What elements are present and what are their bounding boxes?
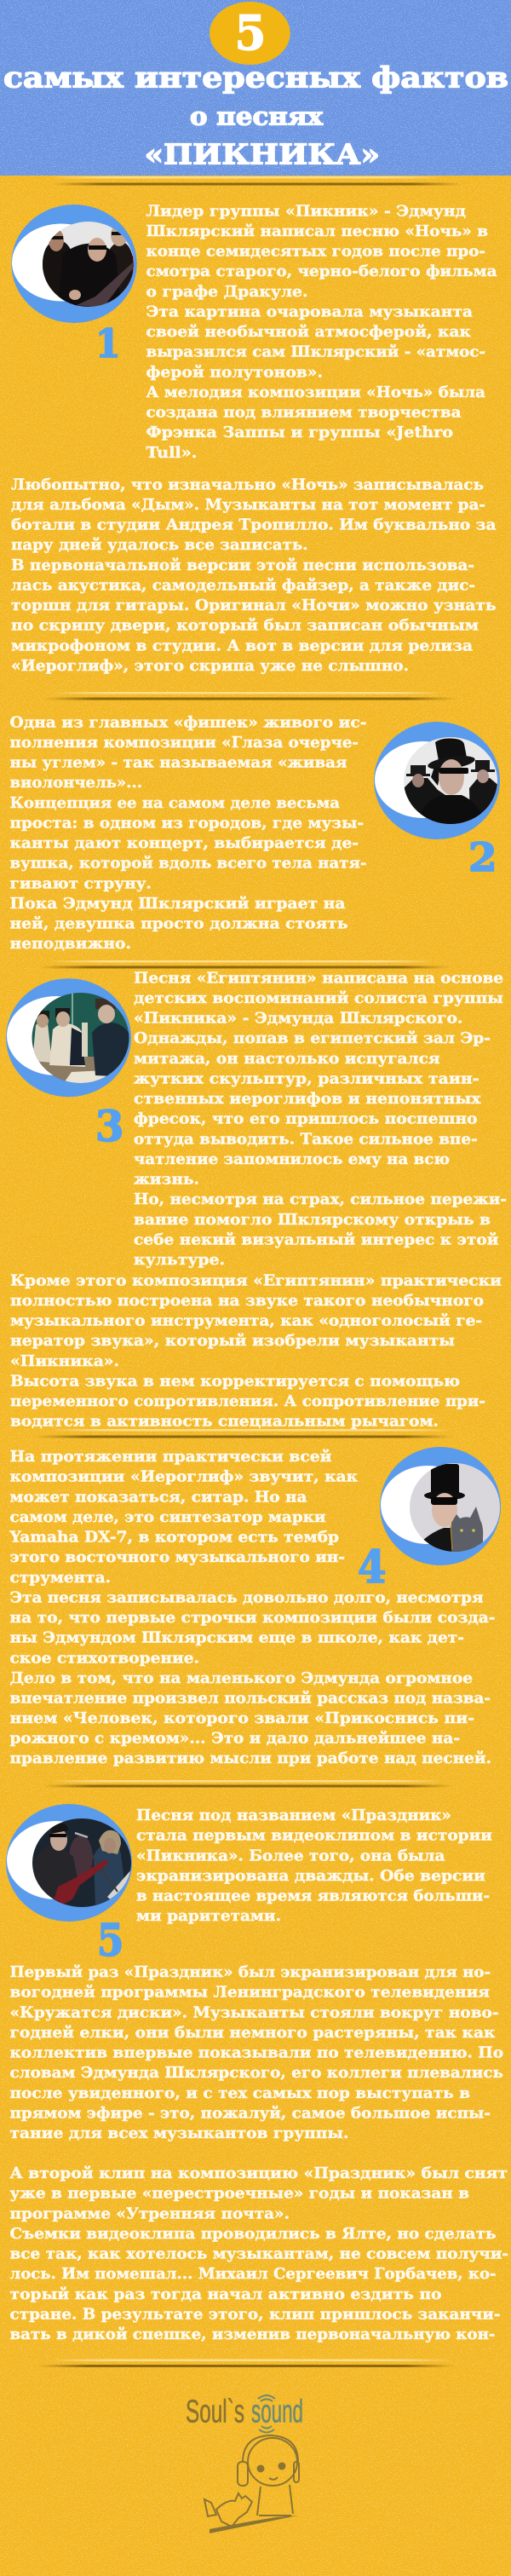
fact 1 intro text: выразился сам Шклярский - «атмос- — [146, 343, 485, 361]
divider 5 — [43, 1780, 453, 1788]
fact 5 second clip text: все так, как хотелось музыкантам, не совсем получи- — [10, 2245, 508, 2263]
fact 5 first clip text: годней елки, они были немного растеряны, так как — [10, 2024, 496, 2042]
fact 4 text: струмента. — [10, 1569, 111, 1587]
title line 3: «ПИКНИКА» — [145, 138, 380, 171]
logo: Soul's sound — [186, 2394, 303, 2533]
fact 3 intro text: детских воспоминаний солиста группы — [134, 989, 503, 1007]
fact 4 text: Эта песня записывалась довольно долго, несмотря — [10, 1588, 484, 1606]
fact 4 text: впечатление произвел польский рассказ под назва- — [10, 1690, 491, 1708]
fact 3 intro text: фресок, что его пришлось поспешно — [134, 1110, 478, 1128]
fact 1 intro text: смотра старого, черно-белого фильма — [146, 262, 497, 280]
fact 5 second clip text: уже в первые «перестроечные» годы и показан в — [10, 2185, 469, 2203]
fact 5 intro text: ми раритетами. — [136, 1907, 281, 1925]
fact 5 first clip text: тание для всех музыкантов группы. — [10, 2124, 349, 2142]
fact 5 second clip text: лось. Им помешал... Михаил Сергеевич Горбачев, ко- — [10, 2265, 496, 2283]
fact 5 first clip text — [10, 1963, 503, 2142]
fact 1 intro text: Лидер группы «Пикник» - Эдмунд — [146, 202, 466, 220]
fact 1 intro text: создана под влиянием творчества — [146, 404, 462, 422]
fact 2 text: полнения композиции «Глаза очерче- — [10, 734, 359, 752]
fact 5 intro text — [136, 1807, 492, 1925]
fact 4 text: композиции «Иероглиф» звучит, как — [10, 1468, 358, 1486]
fact 4 text: может показаться, ситар. Но на — [10, 1488, 307, 1506]
fact 3 intro text: чатление запомнилось ему на всю — [134, 1150, 450, 1168]
fact 3 intro text: оттуда выводить. Такое сильное впе- — [134, 1130, 478, 1148]
fact 2 text: Пока Эдмунд Шклярский играет на — [10, 895, 346, 913]
fact 5 intro text: стала первым видеоклипом в истории — [136, 1827, 492, 1845]
fact 4 text: самом деле, это синтезатор марки — [10, 1508, 325, 1526]
fact 5 intro text: экранизирована дважды. Обе версии — [136, 1867, 485, 1885]
fact 2 text: вушка, которой вдоль всего тела натя- — [10, 855, 366, 873]
fact 3 main text: «Пикника». — [10, 1352, 119, 1370]
fact 3 main text: водится в активность специальным рычагом. — [10, 1413, 439, 1431]
fact 5 first clip text: коллектив впервые показывали по телевидению. По — [10, 2043, 503, 2062]
fact 4 text: ское стихотворение. — [10, 1649, 199, 1667]
fact 3 main text — [10, 1271, 502, 1431]
fact 5 first clip text: прямом эфире - это, пожалуй, самое большое испы- — [10, 2104, 491, 2122]
fact 5 second clip text — [10, 2164, 508, 2343]
fact 4 text: На протяжении практически всей — [10, 1448, 332, 1466]
fact 1 main text: «Иероглиф», этого скрипа уже не слышно. — [11, 657, 409, 675]
divider 4 — [36, 1429, 453, 1438]
fact 5 first clip text: после увиденного, и с тех самых пор выступать в — [10, 2084, 470, 2102]
fact 1 intro text: Эта картина очаровала музыканта — [146, 303, 473, 320]
fact 1 intro text: Фрэнка Заппы и группы «Jethro — [146, 424, 453, 441]
fact 3 intro text: ственных иероглифов и непонятных — [134, 1090, 481, 1108]
fact 3 main text: музыкального инструмента, как «одноголосый ге- — [10, 1312, 482, 1330]
title line 1: самых интересных фактов — [3, 61, 508, 95]
fact 2 text — [10, 713, 366, 953]
fact 3 intro text: культуре. — [134, 1251, 225, 1269]
fact 5 second clip text: вать в дикой спешке, изменив первоначальную кон- — [10, 2325, 495, 2343]
fact 5 first clip text: вогодней программы Ленинградского телевидения — [10, 1984, 490, 2002]
header background: blue — [0, 0, 511, 176]
fact 1 intro text: ферой полутонов». — [146, 363, 323, 381]
fact 2 text: ней, девушка просто должна стоять — [10, 915, 347, 933]
fact 1 main text: по скрипу двери, который был записан обычным — [11, 617, 479, 635]
title line 2: о песнях — [190, 102, 324, 131]
fact 1 main text: В первоначальной версии этой песни использова- — [11, 556, 474, 574]
fact 5 first clip text: Первый раз «Праздник» был экранизирован для но- — [10, 1963, 491, 1981]
fact 1 intro text: о графе Дракуле. — [146, 283, 308, 301]
fact 5 intro text: «Пикника». Более того, она была — [136, 1847, 445, 1864]
fact 2 text: гивают струну. — [10, 874, 152, 892]
fact 2 text: Концепция ее на самом деле весьма — [10, 794, 340, 812]
divider 1 — [51, 176, 462, 186]
fact 5 second clip text: А второй клип на композицию «Праздник» был снят — [10, 2164, 508, 2182]
fact 2 text: проста: в одном из городов, где музы- — [10, 815, 364, 832]
fact 4 text: Yamaha DX-7, в котором есть тембр — [9, 1529, 339, 1546]
fact 3 intro text: Песня «Египтянин» написана на основе — [134, 969, 503, 987]
fact 2 text: неподвижно. — [10, 935, 131, 953]
fact 1 main text: лась акустика, самодельный файзер, а также дис- — [11, 576, 475, 595]
fact 2 portrait — [374, 722, 500, 839]
fact 5 first clip text: «Кружатся диски». Музыканты стояли вокруг ново- — [10, 2003, 499, 2021]
badge: number 5 — [210, 2, 290, 65]
fact 4 text: на то, что первые строчки композиции были созда- — [10, 1609, 496, 1627]
fact 1 intro text: А мелодия композиции «Ночь» была — [146, 383, 485, 401]
fact 1 portrait — [11, 205, 137, 323]
fact 5 portrait — [6, 1804, 135, 1922]
fact 1 intro text: Шклярский написал песню «Ночь» в — [146, 222, 488, 240]
fact 1 intro text — [146, 202, 497, 462]
fact 4 text: ны Эдмундом Шклярским еще в школе, как дет- — [10, 1629, 464, 1647]
divider 6 — [37, 2359, 455, 2367]
badge: number 5: 5 — [235, 5, 266, 61]
fact 3 main text: Высота звука в нем корректируется с помощью — [10, 1372, 460, 1391]
fact 3 intro text: «Пикника» - Эдмунда Шклярского. — [134, 1010, 462, 1028]
fact 5 intro text: в настоящее время являются больши- — [136, 1887, 490, 1905]
fact 3 intro text: Однажды, попав в египетский зал Эр- — [134, 1029, 491, 1047]
fact 3 main text: Кроме этого композиция «Египтянин» практически — [10, 1271, 502, 1289]
fact 1 intro text: своей необычной атмосферой, как — [146, 323, 471, 341]
fact 2 text: ны углем» - так называемая «живая — [10, 754, 347, 772]
number 3: 3 — [95, 1101, 123, 1151]
fact 5 second clip text: торый как раз тогда начал активно ездить по — [10, 2285, 441, 2303]
fact 4 text: этого восточного музыкального ин- — [10, 1548, 345, 1566]
fact 3 portrait — [6, 978, 131, 1097]
fact 1 main text: микрофоном в студии. А вот в версии для релиза — [11, 637, 473, 654]
fact 1 main text: ботали в студии Андрея Тропилло. Им буквально за — [11, 516, 497, 534]
icon: child with headphones and fox — [204, 2435, 299, 2533]
fact 4 text: правление развитию мысли при работе над песней. — [10, 1749, 491, 1767]
fact 2 text: Одна из главных «фишек» живого ис- — [10, 713, 366, 731]
fact 3 intro text — [134, 969, 507, 1269]
fact 3 intro text: митажа, он настолько испугался — [134, 1050, 440, 1068]
fact 2 text: виолончель»... — [10, 774, 142, 792]
header title — [3, 2, 508, 171]
fact 4 text: нием «Человек, которого звали «Прикоснись пи- — [10, 1709, 474, 1727]
fact 4 text — [9, 1448, 495, 1767]
fact 3 main text: нератор звука», который изобрели музыканты — [10, 1332, 455, 1350]
fact 5 second clip text: стране. В результате этого, клип пришлось заканчи- — [10, 2305, 501, 2323]
fact 3 intro text: жутких скульптур, различных таин- — [134, 1070, 479, 1087]
logo wordmark: sound — [251, 2394, 303, 2430]
fact 5 second clip text: программе «Утренняя почта». — [10, 2204, 290, 2222]
fact 3 intro text: Но, несмотря на страх, сильное пережи- — [134, 1190, 507, 1208]
fact 3 intro text: себе некий визуальный интерес к этой — [134, 1230, 499, 1249]
fact 1 intro text: конце семидесятых годов после про- — [146, 243, 485, 261]
fact 1 main text: Любопытно, что изначально «Ночь» записывалась — [11, 475, 484, 493]
number 5: 5 — [97, 1916, 123, 1967]
number 2: 2 — [468, 834, 497, 880]
fact 1 main text: торшн для гитары. Оригинал «Ночи» можно узнать — [11, 596, 496, 614]
fact 4 text: рожного с кремом»... Это и дало дальнейшее на- — [10, 1730, 460, 1747]
fact 4 portrait — [380, 1447, 501, 1565]
divider 3 — [39, 960, 450, 968]
fact 5 intro text: Песня под названием «Праздник» — [136, 1807, 451, 1824]
icon: sound waves — [258, 2395, 275, 2432]
fact 4 text: Дело в том, что на маленького Эдмунда огромное — [10, 1669, 473, 1687]
divider 2 — [44, 692, 456, 700]
number 4: 4 — [358, 1542, 387, 1593]
fact 3 intro text: жизнь. — [134, 1171, 199, 1189]
fact 5 first clip text: словам Эдмунда Шклярского, его коллеги плевались — [10, 2064, 503, 2082]
fact 1 main text: для альбома «Дым». Музыканты на тот момент ра- — [11, 496, 485, 514]
fact 3 main text: полностью построена на звуке такого необычного — [10, 1292, 484, 1310]
fact 5 second clip text: Съемки видеоклипа проводились в Ялте, но сделать — [10, 2225, 497, 2243]
number 1: 1 — [95, 320, 121, 366]
fact 3 intro text: вание помогло Шклярскому открыь в — [134, 1211, 491, 1229]
fact 1 main text — [11, 475, 497, 675]
fact 2 text: канты дают концерт, выбирается де- — [10, 834, 359, 852]
fact 1 main text: пару дней удалось все записать. — [11, 536, 308, 554]
logo wordmark: Soul`s — [186, 2394, 244, 2430]
fact 3 main text: переменного сопротивления. А сопротивление при- — [10, 1392, 485, 1410]
fact 1 intro text: Tull». — [146, 444, 198, 462]
